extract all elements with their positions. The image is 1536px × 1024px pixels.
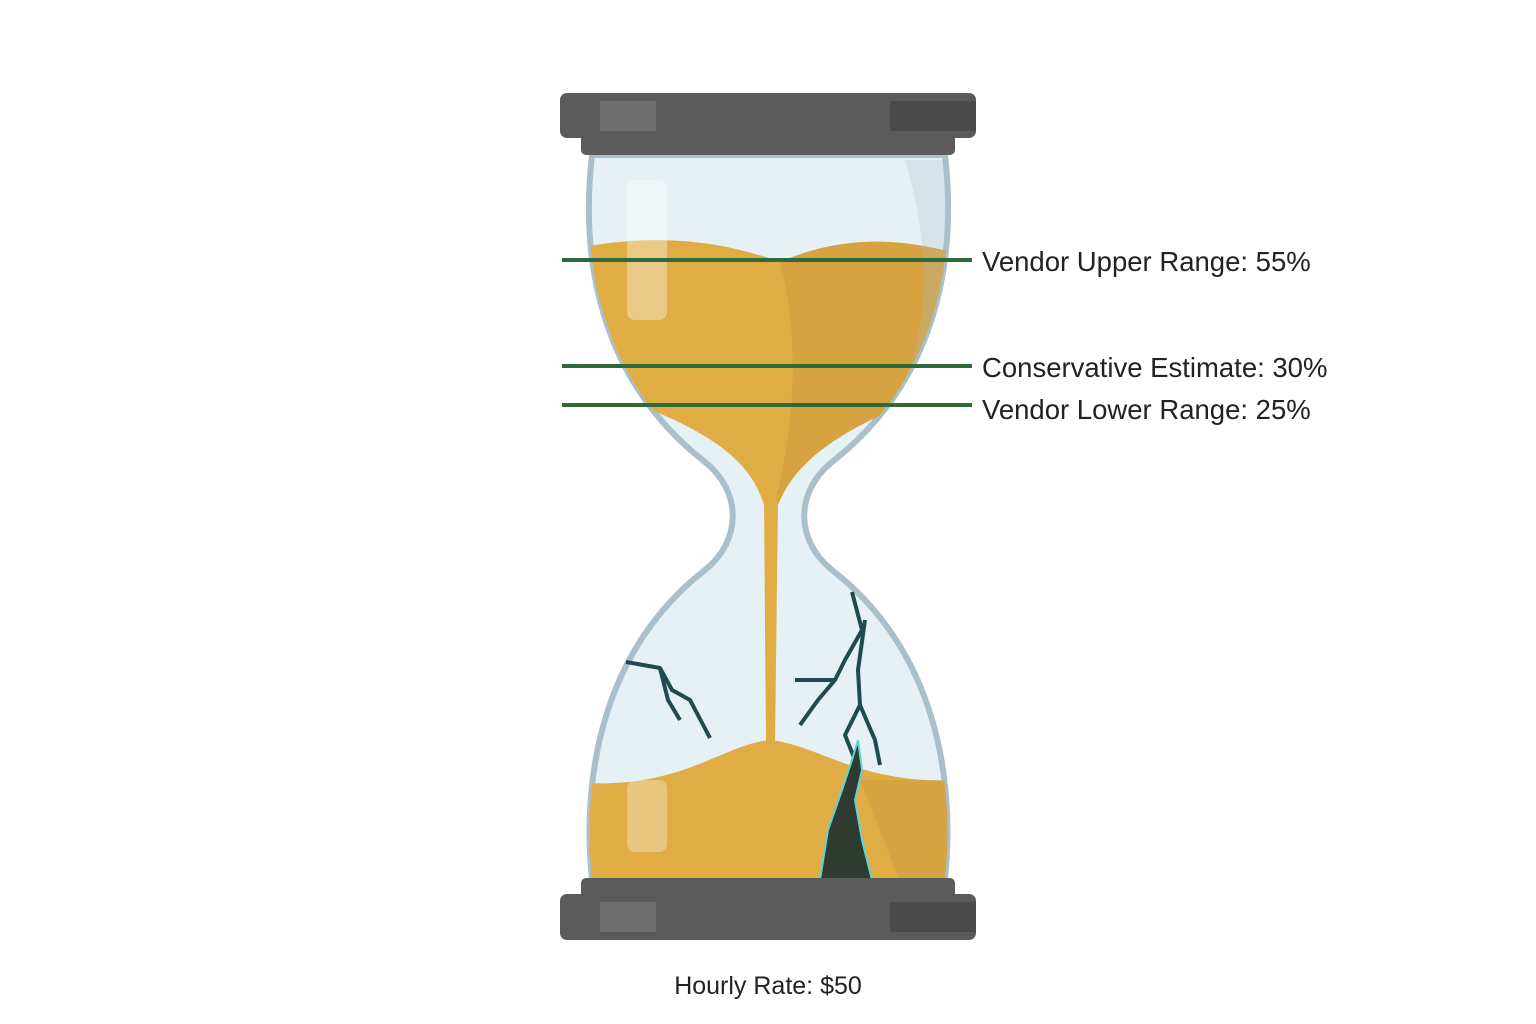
sand stream: [764, 500, 778, 745]
caption: hourly rate: Hourly Rate: $50: [674, 972, 862, 1000]
top sand: [570, 240, 965, 505]
hourglass: [560, 93, 976, 940]
marker: vendor lower range: Vendor Lower Range: 25%: [982, 394, 1311, 425]
crack: large: [820, 740, 872, 880]
bottom cap: [560, 878, 976, 940]
highlights: [627, 180, 667, 320]
cracks: [626, 592, 880, 765]
marker: conservative estimate: Conservative Estimate: 30%: [982, 352, 1327, 383]
glass body: [570, 155, 965, 882]
marker: vendor upper range: Vendor Upper Range: 55%: [982, 246, 1311, 277]
bottom sand: [590, 740, 948, 878]
top cap: [560, 93, 976, 155]
